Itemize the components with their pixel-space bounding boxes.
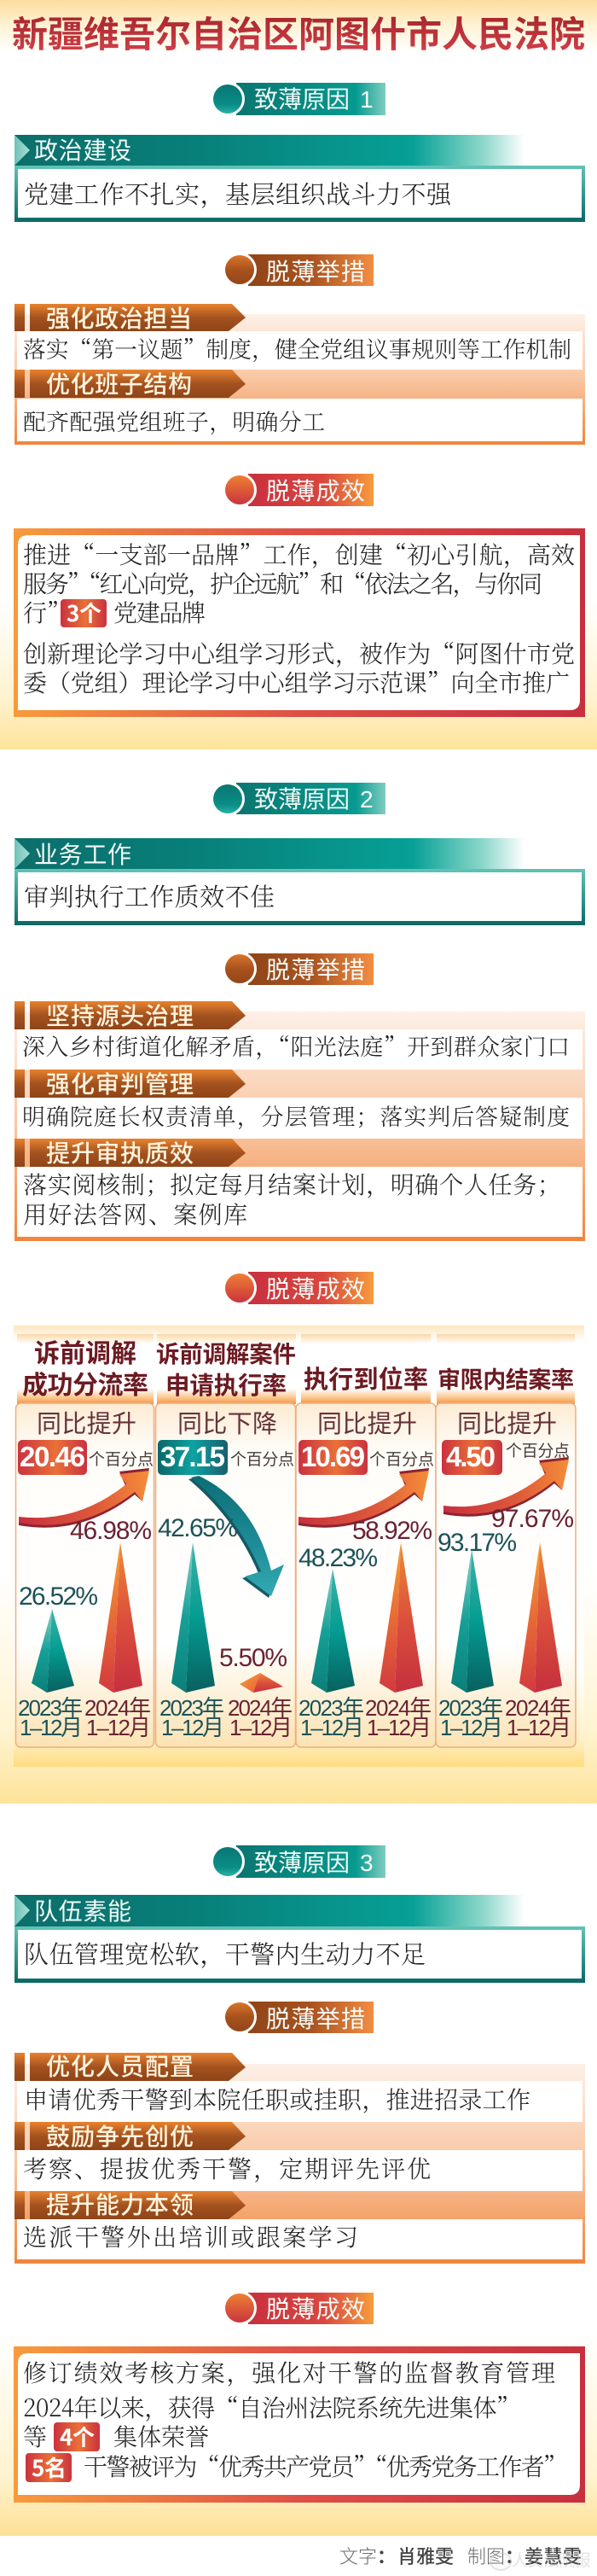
section heading: cause 3: 3 bbox=[360, 1850, 374, 1876]
panel: cause 3 team quality bbox=[14, 1895, 585, 1983]
text block: 服务”“红心向党，护企远航”和“依法之名，与你同 bbox=[23, 566, 542, 600]
value 2023: 26.52% bbox=[19, 1582, 98, 1611]
chart column 2: 诉前调解案件申请执行率 bbox=[155, 1334, 296, 1747]
pyramid 2024 bbox=[380, 1542, 423, 1693]
arrow up bbox=[443, 1457, 569, 1517]
text: 明确院庭长权责清单，分层管理；落实判后答疑制度 bbox=[22, 1099, 570, 1132]
value 2024: 46.98% bbox=[70, 1517, 152, 1545]
header: 成功分流率 bbox=[22, 1364, 148, 1402]
section heading: cause 1: 1 bbox=[360, 86, 374, 113]
axis labels bbox=[438, 1695, 571, 1740]
credits: 姜慧雯 bbox=[525, 2542, 582, 2569]
bar heading: 队伍素能 bbox=[34, 1898, 131, 1925]
section heading: measures 1: 脱薄举措 bbox=[266, 259, 365, 285]
panel: cause 2 business work bbox=[14, 838, 585, 925]
text block: 2024年以来，获得“自治州法院系统先进集体” bbox=[23, 2390, 520, 2424]
axis labels: 1–12月 bbox=[86, 1715, 151, 1740]
bar heading: 政治建设 bbox=[34, 137, 131, 164]
bar heading bbox=[14, 838, 525, 869]
text block: 行 bbox=[23, 595, 47, 629]
value 2023: 42.65% bbox=[158, 1514, 238, 1542]
text: 落实阅核制；拟定每月结案计划，明确个人任务； bbox=[23, 1167, 561, 1201]
axis labels: 2023年 bbox=[159, 1695, 224, 1721]
value 2024: 58.92% bbox=[352, 1517, 432, 1545]
axis labels: 2024年 bbox=[84, 1695, 151, 1721]
credits: ： bbox=[505, 2542, 524, 2569]
panel: measures 1 bbox=[14, 300, 585, 445]
label: 提升审执质效 bbox=[14, 1135, 246, 1169]
change label: 同比下降 bbox=[177, 1404, 277, 1440]
axis labels: 2024年 bbox=[505, 1695, 571, 1721]
value badge: 37.15 bbox=[160, 1441, 225, 1472]
label: 鼓励争先创优: 鼓励争先创优 bbox=[46, 2118, 194, 2153]
chart column 3: 执行到位率 bbox=[296, 1334, 436, 1747]
bar heading: 业务工作 bbox=[34, 842, 131, 868]
pyramid 2024 bbox=[240, 1673, 283, 1693]
arrow down bbox=[188, 1476, 284, 1598]
text box: 审判执行工作质效不佳 bbox=[24, 878, 275, 913]
text box bbox=[14, 1926, 585, 1983]
text box bbox=[14, 166, 585, 222]
text: 用好法答网、案例库 bbox=[23, 1197, 247, 1231]
panel: measures 3 bbox=[14, 2049, 585, 2264]
axis labels: 1–12月 bbox=[367, 1715, 432, 1740]
background: section 1 bbox=[0, 0, 597, 749]
text block: 创新理论学习中心组学习形式，被作为“阿图什市党 bbox=[23, 636, 575, 670]
label: 优化人员配置 bbox=[14, 2049, 246, 2083]
chart column 4: 审限内结案率 bbox=[436, 1334, 576, 1747]
arrow up bbox=[19, 1468, 149, 1528]
text box bbox=[14, 869, 585, 925]
section heading: results 3: 脱薄成效 bbox=[266, 2296, 365, 2322]
text block: 推进“一支部一品牌”工作，创建“初心引航，高效 bbox=[23, 537, 575, 571]
section heading: cause 2: 2 bbox=[360, 786, 374, 813]
bar heading bbox=[14, 1895, 525, 1926]
axis labels: 1–12月 bbox=[229, 1715, 293, 1740]
label: 优化班子结构 bbox=[14, 366, 246, 400]
bar heading bbox=[14, 135, 525, 166]
section heading: results 3 bbox=[223, 2291, 374, 2325]
axis labels bbox=[159, 1695, 293, 1740]
text block: 等 bbox=[23, 2419, 47, 2453]
section heading: cause 2: 致薄原因 bbox=[254, 786, 350, 813]
section heading: measures 1 bbox=[223, 253, 374, 287]
label: 提升审执质效: 提升审执质效 bbox=[46, 1135, 194, 1169]
text block bbox=[23, 537, 575, 699]
label: 坚持源头治理: 坚持源头治理 bbox=[46, 998, 194, 1032]
pyramid 2023 bbox=[32, 1609, 74, 1693]
axis labels: 1–12月 bbox=[20, 1715, 83, 1740]
pyramid 2024 bbox=[519, 1542, 562, 1693]
label: 强化审判管理 bbox=[14, 1066, 246, 1100]
background: section 2 bbox=[0, 749, 597, 1804]
section heading: results 1: 脱薄成效 bbox=[266, 478, 365, 504]
axis labels bbox=[298, 1695, 432, 1740]
axis labels: 2024年 bbox=[365, 1695, 432, 1721]
credits: 文字 bbox=[339, 2542, 377, 2569]
axis labels: 1–12月 bbox=[507, 1715, 571, 1740]
value 2023: 93.17% bbox=[438, 1529, 517, 1557]
panel: results 3 bbox=[14, 2346, 585, 2503]
label: 鼓励争先创优 bbox=[14, 2118, 246, 2153]
unit: 个百分点 bbox=[506, 1438, 570, 1461]
panel: results 1 bbox=[14, 528, 585, 717]
pyramid 2023 bbox=[451, 1549, 494, 1693]
credits bbox=[339, 2542, 582, 2569]
title: 新疆维吾尔自治区阿图什市人民法院 bbox=[12, 6, 585, 58]
axis labels: 2023年 bbox=[298, 1695, 364, 1721]
chart column 1: 诉前调解成功分流率 bbox=[15, 1332, 154, 1747]
axis labels: 2023年 bbox=[18, 1695, 83, 1721]
highlight: 3个: 3个 bbox=[67, 597, 101, 628]
label: 优化班子结构: 优化班子结构 bbox=[46, 366, 192, 400]
change label: 同比提升 bbox=[457, 1404, 557, 1440]
unit: 个百分点 bbox=[89, 1447, 154, 1470]
pyramid 2024 bbox=[99, 1542, 142, 1693]
value badge: 20.46 bbox=[20, 1441, 85, 1472]
credits: 肖雅雯 bbox=[397, 2542, 454, 2569]
text: 选派干警外出培训或跟案学习 bbox=[23, 2219, 358, 2253]
axis labels: 2023年 bbox=[438, 1695, 503, 1721]
axis labels: 1–12月 bbox=[161, 1715, 224, 1740]
axis labels: 2024年 bbox=[228, 1695, 293, 1721]
text block: 党建品牌 bbox=[113, 595, 206, 629]
section heading: results 1 bbox=[223, 473, 374, 507]
label: 提升能力本领 bbox=[14, 2187, 246, 2221]
axis labels: 1–12月 bbox=[440, 1715, 503, 1740]
text: 落实“第一议题”制度，健全党组议事规则等工作机制 bbox=[23, 331, 571, 364]
change label: 同比提升 bbox=[37, 1404, 136, 1440]
label: 强化政治担当: 强化政治担当 bbox=[46, 300, 192, 335]
text: 配齐配强党组班子，明确分工 bbox=[23, 404, 325, 437]
text block: 修订绩效考核方案，强化对干警的监督教育管理 bbox=[23, 2355, 555, 2389]
text bbox=[23, 1167, 561, 1231]
label: 强化审判管理: 强化审判管理 bbox=[46, 1066, 194, 1100]
text: 考察、提拔优秀干警，定期评先评优 bbox=[23, 2151, 431, 2185]
text block: 集体荣誉 bbox=[113, 2419, 209, 2453]
section heading: measures 2: 脱薄举措 bbox=[266, 957, 365, 983]
header: 诉前调解案件 bbox=[156, 1335, 296, 1369]
value 2023: 48.23% bbox=[298, 1544, 378, 1572]
pyramid 2023 bbox=[311, 1569, 355, 1693]
header: 审限内结案率 bbox=[438, 1361, 574, 1395]
text: 申请优秀干警到本院任职或挂职，推进招录工作 bbox=[24, 2082, 530, 2116]
label: 强化政治担当 bbox=[14, 300, 246, 335]
header: 诉前调解 bbox=[34, 1332, 136, 1370]
section heading: measures 3 bbox=[223, 2000, 374, 2034]
section heading: cause 3 bbox=[211, 1845, 385, 1879]
value badge: 4.50 bbox=[446, 1441, 496, 1472]
text block: 委（党组）理论学习中心组学习示范课”向全市推广 bbox=[23, 665, 570, 699]
watermark: 人民法院报 bbox=[512, 2548, 591, 2571]
label: 优化人员配置: 优化人员配置 bbox=[46, 2049, 194, 2083]
chart panel backdrop bbox=[14, 1326, 584, 1767]
text: 深入乡村街道化解矛盾，“阳光法庭”开到群众家门口 bbox=[22, 1029, 570, 1062]
label: 提升能力本领: 提升能力本领 bbox=[46, 2187, 194, 2221]
background: section 3 bbox=[0, 1804, 597, 2536]
unit: 个百分点 bbox=[230, 1447, 294, 1470]
section heading: measures 3: 脱薄举措 bbox=[266, 2006, 365, 2032]
value 2024: 5.50% bbox=[219, 1644, 287, 1672]
value badge: 10.69 bbox=[301, 1441, 365, 1472]
section heading: results 2 bbox=[223, 1271, 374, 1305]
highlight: 5名: 5名 bbox=[32, 2451, 67, 2483]
pyramid 2023 bbox=[171, 1542, 215, 1693]
text block: 干警被评为“优秀共产党员”“优秀党务工作者” bbox=[84, 2449, 567, 2483]
header: 申请执行率 bbox=[165, 1367, 287, 1402]
panel: cause 1 political construction bbox=[14, 135, 585, 222]
header bbox=[22, 1332, 148, 1402]
header: 执行到位率 bbox=[304, 1360, 428, 1396]
axis labels bbox=[18, 1695, 151, 1740]
value 2024: 97.67% bbox=[491, 1505, 574, 1533]
text block: ” bbox=[47, 595, 71, 629]
axis labels: 1–12月 bbox=[300, 1715, 364, 1740]
text box: 党建工作不扎实，基层组织战斗力不强 bbox=[24, 176, 452, 211]
credits: 制图 bbox=[467, 2542, 505, 2569]
section heading: results 2: 脱薄成效 bbox=[266, 1276, 365, 1303]
header bbox=[156, 1335, 296, 1402]
section heading: measures 2 bbox=[223, 952, 374, 986]
text box: 队伍管理宽松软，干警内生动力不足 bbox=[24, 1936, 426, 1971]
change label: 同比提升 bbox=[317, 1404, 417, 1440]
unit: 个百分点 bbox=[369, 1447, 434, 1470]
highlight: 4个: 4个 bbox=[60, 2421, 95, 2452]
text block bbox=[23, 2355, 567, 2483]
section heading: cause 1: 致薄原因 bbox=[254, 86, 350, 113]
panel: measures 2 bbox=[14, 998, 585, 1241]
label: 坚持源头治理 bbox=[14, 998, 246, 1032]
section heading: cause 1 bbox=[211, 82, 385, 116]
section heading: cause 2 bbox=[211, 782, 385, 816]
arrow up bbox=[298, 1468, 429, 1528]
section heading: cause 3: 致薄原因 bbox=[254, 1850, 350, 1876]
credits: ： bbox=[377, 2542, 396, 2569]
